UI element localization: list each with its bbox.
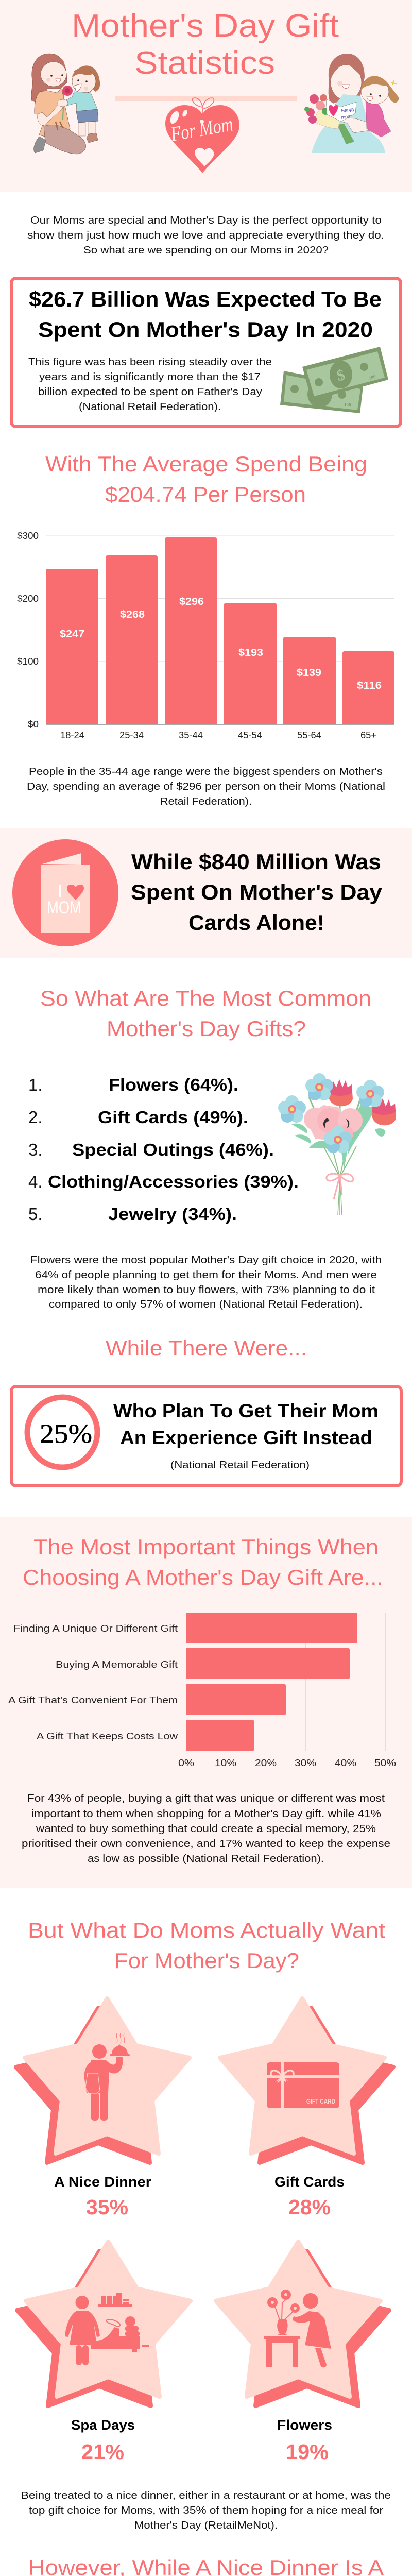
bar values: $296 — [179, 596, 204, 607]
ranked gift list: Gift Cards (49%). — [98, 1108, 248, 1127]
panel: greeting cards — [0, 828, 412, 958]
ranked gift list: Jewelry (34%). — [108, 1205, 237, 1224]
bar values — [60, 596, 382, 691]
bars — [46, 537, 394, 724]
category labels: Finding A Unique Or Different Gift — [13, 1623, 178, 1634]
ranked gift list: Clothing/Accessories (39%). — [48, 1172, 299, 1191]
label: A Nice Dinner — [54, 2174, 152, 2190]
dinner paragraph — [21, 2490, 391, 2531]
callout heading: Spent On Mother's Day — [131, 880, 383, 904]
stat ring: 25%: 25% — [40, 1419, 92, 1449]
ranked gift list: 3. — [28, 1140, 43, 1159]
flowers paragraph: more likely than women to buy flowers, with 73% planning to do it — [38, 1284, 375, 1296]
percentage: 28% — [288, 2195, 331, 2219]
icon: dollar bills: 100 — [368, 374, 376, 381]
x axis labels: 45-54 — [238, 730, 262, 740]
heading: most common gifts — [40, 986, 371, 1041]
flowers paragraph — [30, 1255, 382, 1310]
callout heading: Cards Alone! — [188, 910, 324, 935]
star icon: waiter — [16, 1998, 190, 2163]
x axis labels: 18-24 — [60, 730, 84, 740]
title — [72, 8, 339, 81]
ranked gift list: 2. — [28, 1108, 43, 1127]
ranked gift list: Flowers (64%). — [109, 1075, 238, 1094]
age paragraph: Day, spending an average of $296 per person on their Moms (National — [27, 781, 385, 792]
age paragraph — [27, 766, 385, 807]
panel: flowers — [216, 2242, 389, 2464]
category labels: A Gift That's Convenient For Them — [8, 1695, 178, 1705]
x axis labels: 55-64 — [297, 730, 321, 740]
x axis labels: 25-34 — [119, 730, 144, 740]
heading: what moms want — [28, 1918, 385, 1973]
dinner paragraph: top gift choice for Moms, with 35% of them hoping for a nice meal for — [29, 2505, 383, 2516]
ranked gift list: Special Outings (46%). — [72, 1140, 274, 1159]
heading — [23, 1535, 383, 1589]
star icon: woman arranging flowers — [216, 2242, 389, 2406]
label: Gift Cards — [274, 2174, 345, 2190]
callout text: This figure was has been rising steadily over the — [28, 357, 272, 368]
callout text: (National Retail Federation). — [79, 401, 221, 413]
icon: mother with daughter illustration: Happy — [341, 106, 355, 113]
icon: I love mom card — [12, 839, 118, 946]
heading: most common gifts: So What Are The Most Common — [40, 986, 371, 1010]
heading: Choosing A Mother's Day Gift Are... — [23, 1565, 383, 1589]
category labels: A Gift That Keeps Costs Low — [37, 1731, 178, 1741]
callout heading — [113, 1400, 379, 1448]
flowers paragraph: compared to only 57% of women (National Retail Federation). — [49, 1299, 363, 1310]
percentage: 35% — [86, 2195, 128, 2219]
ranked gift list: 4. — [28, 1172, 43, 1191]
flowers paragraph: Flowers were the most popular Mother's Day gift choice in 2020, with — [30, 1255, 382, 1266]
x axis labels: 50% — [374, 1758, 396, 1768]
title: Mother's Day Gift — [72, 8, 339, 44]
bar values: $193 — [238, 647, 263, 658]
label: Spa Days — [71, 2417, 135, 2433]
x axis labels: 35-44 — [179, 730, 203, 740]
panel: most important things — [0, 1517, 412, 1888]
icon: mother with son illustration — [31, 54, 100, 154]
intro paragraph: Our Moms are special and Mother's Day is the perfect opportunity to — [30, 215, 382, 226]
star icon: spa treatment — [17, 2242, 191, 2406]
dinner paragraph: Mother's Day (RetailMeNot). — [134, 2520, 278, 2531]
percentage: 19% — [286, 2440, 329, 2464]
panel: gift cards — [220, 1998, 393, 2219]
callout heading: While $840 Million Was — [131, 850, 381, 874]
callout heading: An Experience Gift Instead — [120, 1427, 372, 1448]
bar values: $247 — [60, 629, 84, 640]
heading: most common gifts: Mother's Day Gifts? — [107, 1016, 306, 1041]
category labels: Buying A Memorable Gift — [56, 1659, 178, 1670]
age paragraph: People in the 35-44 age range were the biggest spenders on Mother's — [29, 766, 383, 777]
source: (National Retail Federation) — [170, 1460, 310, 1471]
y axis labels — [17, 531, 39, 730]
icon: mother with daughter illustration: mom — [341, 113, 352, 120]
icon: dollar bills: 100 — [344, 402, 351, 408]
ranked gift list: 5. — [28, 1205, 43, 1224]
paragraph — [22, 1793, 390, 1865]
x axis labels: 40% — [335, 1758, 356, 1768]
icon: I love mom card: MOM — [47, 898, 81, 918]
y axis labels: $100 — [17, 656, 39, 667]
y axis labels: $200 — [17, 594, 39, 604]
age paragraph: Retail Federation). — [160, 796, 252, 807]
y axis labels: $0 — [28, 719, 39, 730]
callout text: billion expected to be spent on Father's Day — [38, 386, 262, 398]
heading: average spend — [45, 452, 367, 506]
callout text: years and is significantly more than the $17 — [39, 371, 261, 383]
bar values: $116 — [357, 680, 382, 691]
ranked gift list — [28, 1075, 299, 1224]
paragraph: wanted to buy something that could create a special memory, 25% — [36, 1823, 376, 1835]
icon: dollar bills — [280, 347, 388, 413]
dinner paragraph: Being treated to a nice dinner, either in a restaurant or at home, was the — [21, 2490, 391, 2501]
icon: For Mom heart — [165, 98, 239, 173]
x axis labels: 10% — [215, 1758, 236, 1768]
panel: $26.7 billion callout — [11, 278, 401, 427]
panel: header — [0, 0, 412, 192]
callout text — [28, 357, 272, 413]
title: Statistics — [134, 45, 275, 81]
icon: mother with daughter illustration — [304, 54, 399, 153]
heading: what moms want: For Mother's Day? — [114, 1948, 299, 1973]
ranked gift list: 1. — [28, 1075, 43, 1094]
callout heading: Who Plan To Get Their Mom — [113, 1400, 379, 1421]
icon: flower bouquet — [278, 1073, 396, 1215]
callout heading: $26.7 Billion Was Expected To Be — [29, 287, 382, 311]
label: Flowers — [277, 2417, 332, 2433]
x axis labels: 20% — [255, 1758, 277, 1768]
heading: The Most Important Things When — [33, 1535, 379, 1559]
paragraph: as low as possible (National Retail Federation). — [88, 1853, 324, 1865]
intro paragraph: So what are we spending on our Moms in 2020? — [83, 245, 329, 256]
heading: average spend: $204.74 Per Person — [105, 482, 306, 506]
stat ring: 25% — [27, 1397, 97, 1467]
callout heading: Spent On Mother's Day In 2020 — [38, 317, 373, 342]
heading: average spend: With The Average Spend Being — [45, 452, 367, 476]
star icon: gift card — [220, 1998, 393, 2163]
panel: experience gift callout — [11, 1386, 401, 1486]
bars — [186, 1613, 357, 1751]
horizontal bar chart — [8, 1613, 396, 1768]
intro paragraph: show them just how much we love and appreciate everything they do. — [27, 230, 384, 241]
paragraph: prioritised their own convenience, and 17% wanted to keep the expense — [22, 1838, 390, 1850]
callout heading — [131, 850, 383, 935]
bar chart: spend by age — [17, 531, 394, 740]
heading: while there were: While There Were... — [106, 1336, 307, 1360]
category labels — [8, 1623, 178, 1741]
x axis labels: 65+ — [360, 730, 376, 740]
x axis labels: 0% — [178, 1758, 194, 1768]
bar values: $268 — [120, 609, 145, 620]
star icon: gift card: GIFT CARD — [306, 2097, 335, 2105]
paragraph: important to them when shopping for a Mother's Day gift. while 41% — [31, 1808, 381, 1820]
percentage: 21% — [81, 2440, 124, 2464]
callout heading — [29, 287, 382, 342]
paragraph: For 43% of people, buying a gift that was unique or different was most — [27, 1793, 385, 1804]
heading: what moms want: But What Do Moms Actually Want — [28, 1918, 385, 1942]
flowers paragraph: 64% of people planning to get them for their Moms. And men were — [35, 1269, 377, 1281]
divider band — [115, 96, 297, 101]
icon: For Mom heart: For Mom — [168, 112, 235, 146]
x axis labels — [178, 1758, 396, 1768]
bar values: $139 — [297, 667, 321, 679]
x axis labels — [60, 730, 376, 740]
panel: spa days — [17, 2242, 191, 2464]
y axis labels: $300 — [17, 531, 39, 541]
icon: dollar bills: $ — [335, 366, 347, 384]
intro paragraph — [27, 215, 384, 256]
panel: a nice dinner — [16, 1998, 190, 2219]
x axis labels: 30% — [295, 1758, 316, 1768]
